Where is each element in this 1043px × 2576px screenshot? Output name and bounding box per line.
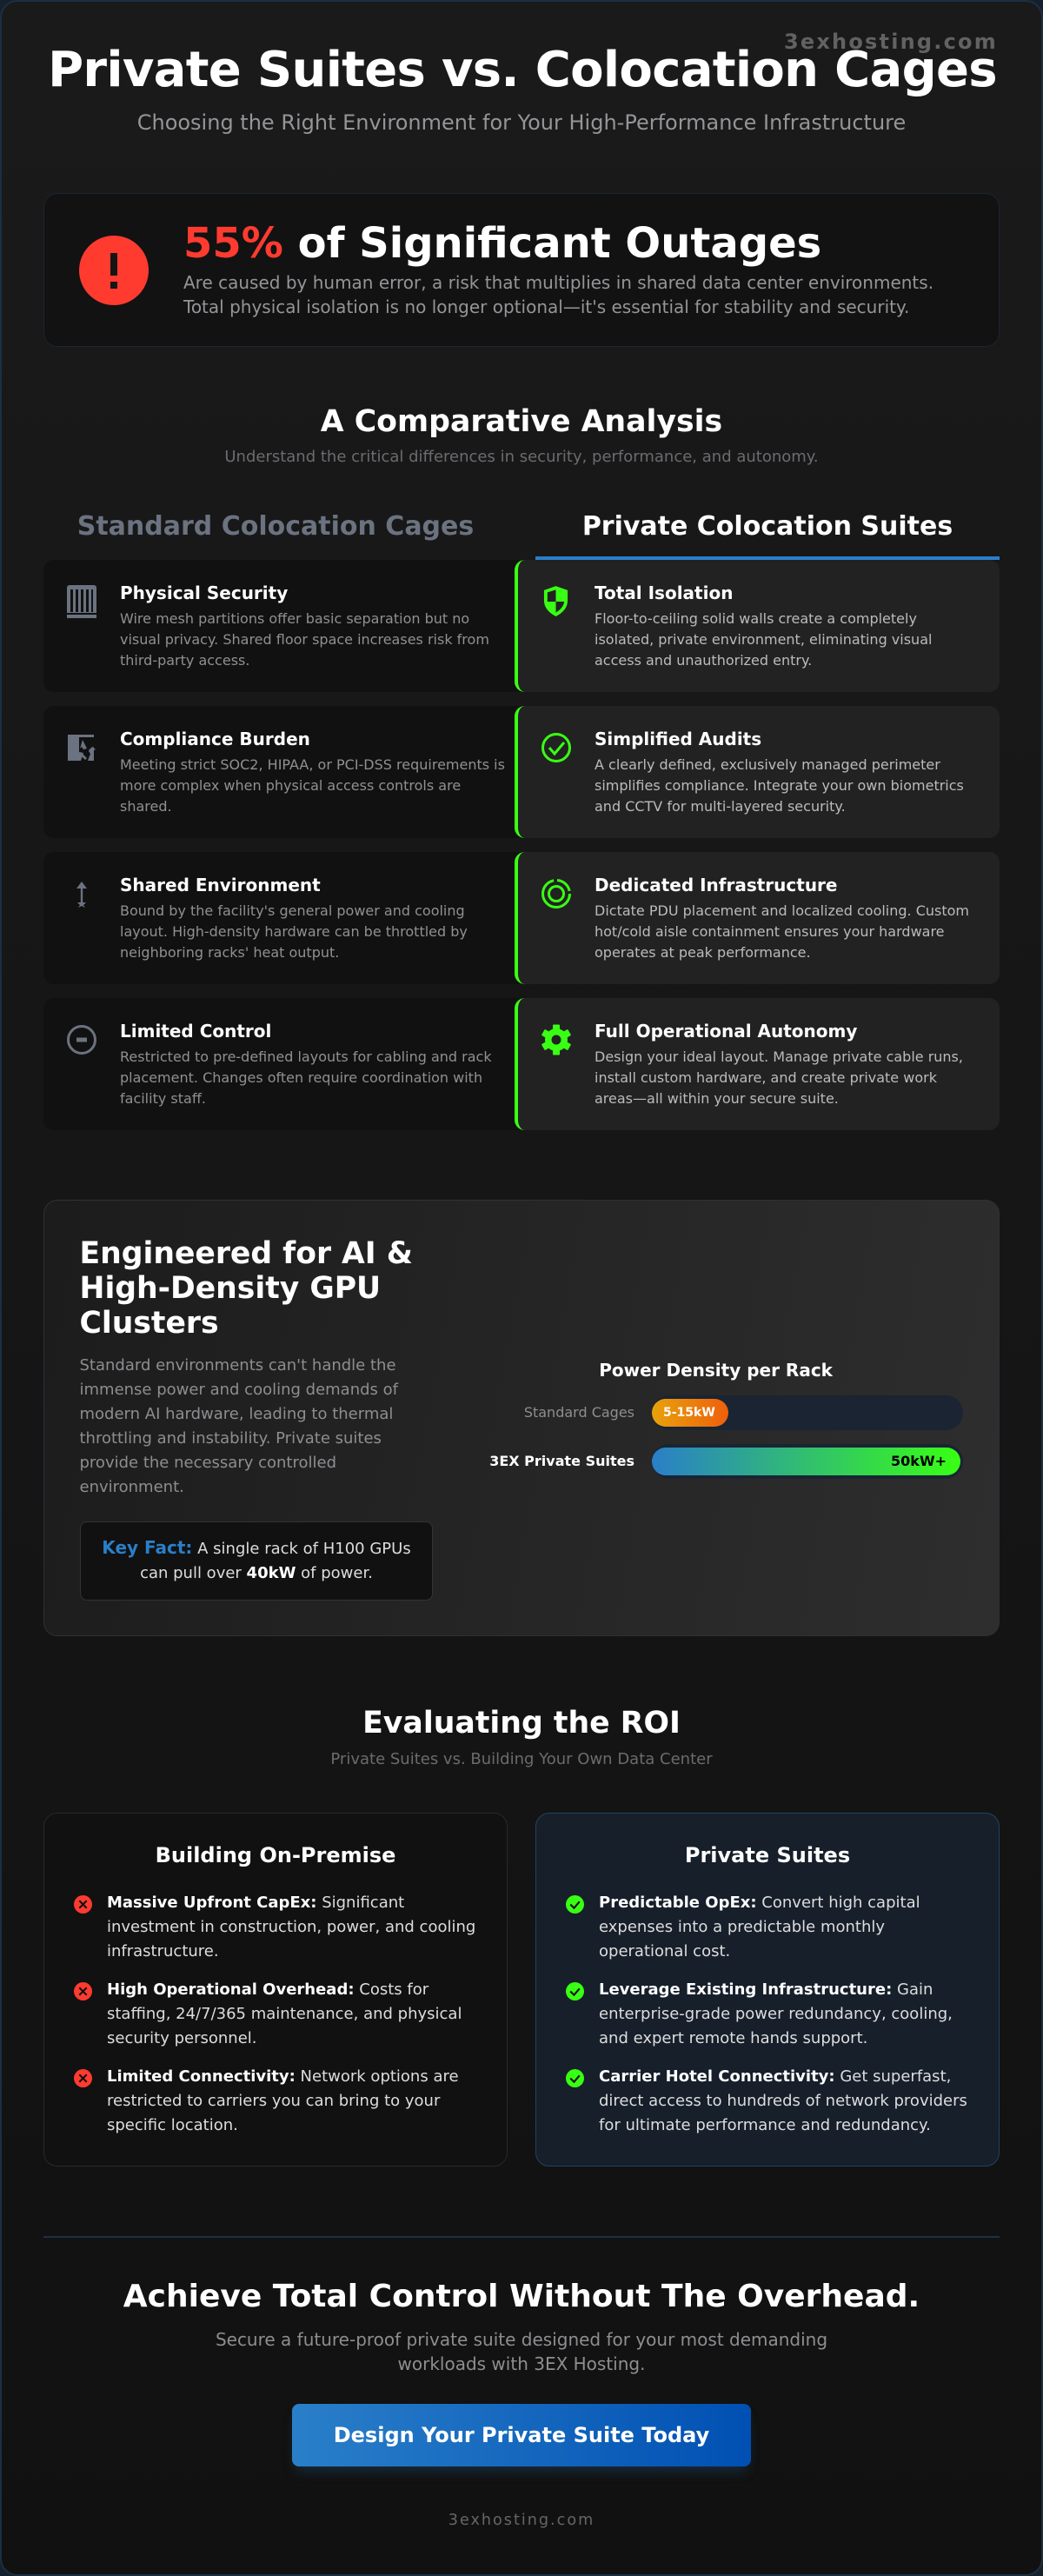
icon: check — [566, 2069, 584, 2087]
item: capex: infrastructure. — [107, 1942, 219, 1960]
callout: key fact — [80, 1521, 433, 1601]
panel text: modern AI hardware, leading to thermal — [80, 1405, 393, 1423]
panel text — [80, 1356, 398, 1496]
section subtitle: ROI: Private Suites vs. Building Your Own Data Center — [330, 1750, 713, 1768]
icon: up-down arrow — [76, 882, 87, 908]
card: dedicated infrastructure — [515, 852, 1000, 984]
card: total isolation: Total Isolation — [595, 582, 733, 603]
footer: 3exhosting.com — [448, 2512, 595, 2529]
icon: exit door — [68, 735, 96, 761]
card: total isolation — [515, 560, 1000, 692]
item: carrier hotel: direct access to hundreds of network providers — [599, 2092, 967, 2110]
panel heading: Engineered for AI & — [80, 1236, 413, 1271]
item: connectivity: restricted to carriers you can bring to your — [107, 2092, 440, 2110]
panel heading — [80, 1236, 413, 1341]
call to action text: workloads with 3EX Hosting. — [398, 2353, 645, 2374]
icon: no entry circle — [67, 1025, 96, 1055]
card: full operational autonomy — [515, 998, 1000, 1130]
card: simplified audits: Simplified Audits — [595, 729, 761, 749]
item: carrier hotel — [599, 2067, 967, 2134]
card: physical security: Wire mesh partitions offer basic separation but no — [120, 610, 469, 626]
call to action heading: Achieve Total Control Without The Overhead. — [123, 2279, 920, 2314]
card: dedicated infrastructure: operates at peak performance. — [595, 944, 811, 960]
item: carrier hotel: for ultimate performance and redundancy. — [599, 2116, 931, 2134]
card: compliance burden: Meeting strict SOC2, HIPAA, or PCI-DSS requirements is — [120, 756, 505, 772]
item: opex: expenses into a predictable monthly — [599, 1918, 885, 1936]
item: infrastructure — [599, 1980, 953, 2047]
card: shared environment — [43, 852, 530, 984]
item: opex: Predictable OpEx: Convert high capital — [599, 1894, 920, 1912]
card: compliance burden: more complex when physical access controls are — [120, 777, 461, 793]
icon: check — [566, 1895, 584, 1914]
call to action text: Secure a future-proof private suite designed for your most demanding — [216, 2329, 827, 2350]
card: full operational autonomy: areas—all within your secure suite. — [595, 1090, 839, 1106]
card: limited control: placement. Changes often require coordination with — [120, 1069, 482, 1085]
button — [292, 2404, 751, 2466]
card: dedicated infrastructure: hot/cold aisle containment ensures your hardware — [595, 923, 945, 939]
title: Private Suites vs. Colocation Cages — [48, 42, 997, 98]
panel heading: Private Suites — [685, 1843, 850, 1867]
card: limited control: Limited Control — [120, 1021, 271, 1042]
column heading: standard cages: Standard Colocation Cages — [77, 511, 474, 542]
item: connectivity: Limited Connectivity: Network options are — [107, 2067, 459, 2086]
callout: key fact: Key Fact: A single rack of H100 GPUs — [102, 1537, 411, 1558]
card: physical security: visual privacy. Shared floor space increases risk from — [120, 631, 489, 647]
panel heading: Clusters — [80, 1306, 219, 1341]
bar: standard cages: 5-15kW — [663, 1406, 715, 1420]
card: full operational autonomy: Full Operational Autonomy — [595, 1021, 857, 1042]
bar: standard cages — [652, 1395, 963, 1430]
bar: private suites — [652, 1444, 963, 1479]
item: opex — [599, 1894, 920, 1960]
call to action text — [216, 2329, 827, 2374]
item: connectivity: specific location. — [107, 2116, 238, 2134]
item: capex: investment in construction, power, and cooling — [107, 1918, 475, 1936]
icon: exclamation — [79, 236, 149, 305]
card: shared environment: layout. High-density hardware can be throttled by — [120, 923, 468, 939]
item: opex: operational cost. — [599, 1942, 730, 1960]
card: compliance burden: Compliance Burden — [120, 729, 310, 749]
item: infrastructure: Leverage Existing Infrastructure: Gain — [599, 1980, 933, 1999]
card: physical security — [43, 560, 530, 692]
card: compliance burden — [43, 706, 530, 838]
card: physical security: Physical Security — [120, 582, 288, 603]
item: capex: Massive Upfront CapEx: Significant — [107, 1894, 404, 1912]
card: limited control — [43, 998, 530, 1130]
icon: check circle — [541, 733, 571, 762]
icon: shield — [544, 586, 568, 616]
chart: power density per rack — [489, 1360, 963, 1479]
panel text: environment. — [80, 1478, 184, 1496]
section subtitle: Understand the critical differences in security, performance, and autonomy. — [224, 448, 819, 466]
card: total isolation: Floor-to-ceiling solid walls create a completely — [595, 610, 917, 626]
panel text: Standard environments can't handle the — [80, 1356, 396, 1375]
card: total isolation: isolated, private environment, eliminating visual — [595, 631, 932, 647]
panel text: throttling and instability. Private suites — [80, 1429, 382, 1448]
icon: cross — [74, 1895, 92, 1914]
card: compliance burden: shared. — [120, 798, 172, 814]
card: dedicated infrastructure: Dictate PDU placement and localized cooling. Custom — [595, 902, 969, 918]
card: shared environment: Shared Environment — [120, 875, 321, 895]
watermark: 3exhosting.com — [784, 30, 998, 54]
item: overhead: security personnel. — [107, 2029, 257, 2047]
item: capex — [107, 1894, 475, 1960]
card: full operational autonomy: install custom hardware, and create private work — [595, 1069, 937, 1085]
card: limited control: Restricted to pre-defined layouts for cabling and rack — [120, 1048, 492, 1064]
panel heading: High-Density GPU — [80, 1271, 381, 1306]
card: simplified audits: simplifies compliance. Integrate your own biometrics — [595, 777, 964, 793]
icon: cross — [74, 1982, 92, 2000]
callout: key fact: can pull over 40kW of power. — [140, 1564, 373, 1582]
card: total isolation: access and unauthorized entry. — [595, 652, 812, 668]
button: Design Your Private Suite Today — [334, 2423, 709, 2447]
icon: check — [566, 1982, 584, 2000]
item: carrier hotel: Carrier Hotel Connectivity: Get superfast, — [599, 2067, 951, 2086]
icon: cooling rings — [541, 879, 571, 909]
panel: AI and high density — [43, 1200, 1000, 1636]
item: connectivity — [107, 2067, 459, 2134]
section heading: ROI: Evaluating the ROI — [362, 1706, 681, 1741]
panel heading: Building On-Premise — [156, 1843, 395, 1867]
panel: private suites — [535, 1813, 1000, 2167]
column heading: private suites — [535, 509, 1000, 560]
card: simplified audits: and CCTV for multi-layered security. — [595, 798, 846, 814]
panel: building on-premise — [43, 1813, 508, 2167]
card: shared environment: Bound by the facility's general power and cooling — [120, 902, 465, 918]
panel text: immense power and cooling demands of — [80, 1381, 398, 1399]
panel text: provide the necessary controlled — [80, 1454, 336, 1472]
column heading: private suites: Private Colocation Suites — [582, 511, 953, 542]
card: simplified audits — [515, 706, 1000, 838]
subtitle: Choosing the Right Environment for Your High-Performance Infrastructure — [137, 110, 906, 135]
card: dedicated infrastructure: Dedicated Infrastructure — [595, 875, 837, 895]
alert text — [183, 272, 933, 317]
item: infrastructure: and expert remote hands support. — [599, 2029, 867, 2047]
bar: private suites: 50kW+ — [891, 1453, 947, 1469]
icon: gate — [67, 585, 96, 618]
alert heading: 55% of Significant Outages — [183, 219, 821, 268]
item: overhead: High Operational Overhead: Costs for — [107, 1980, 428, 1999]
chart title: Power Density per Rack — [599, 1360, 833, 1381]
card: full operational autonomy: Design your ideal layout. Manage private cable runs, — [595, 1048, 963, 1064]
alert text: Total physical isolation is no longer optional—it's essential for stability and security. — [183, 296, 909, 317]
card: shared environment: neighboring racks' heat output. — [120, 944, 339, 960]
panel: outage alert — [43, 193, 1000, 347]
item: overhead — [107, 1980, 462, 2047]
card: limited control: facility staff. — [120, 1090, 206, 1106]
item: infrastructure: enterprise-grade power redundancy, cooling, — [599, 2005, 953, 2023]
bar label: standard: Standard Cages — [524, 1404, 634, 1421]
card: simplified audits: A clearly defined, exclusively managed perimeter — [595, 756, 940, 772]
bar label: private: 3EX Private Suites — [489, 1453, 634, 1469]
alert text: Are caused by human error, a risk that multiplies in shared data center environments. — [183, 272, 933, 293]
icon: cross — [74, 2069, 92, 2087]
item: overhead: staffing, 24/7/365 maintenance, and physical — [107, 2005, 462, 2023]
icon: gear — [541, 1024, 571, 1055]
section heading: comparative analysis: A Comparative Analysis — [321, 404, 722, 439]
card: physical security: third-party access. — [120, 652, 249, 668]
